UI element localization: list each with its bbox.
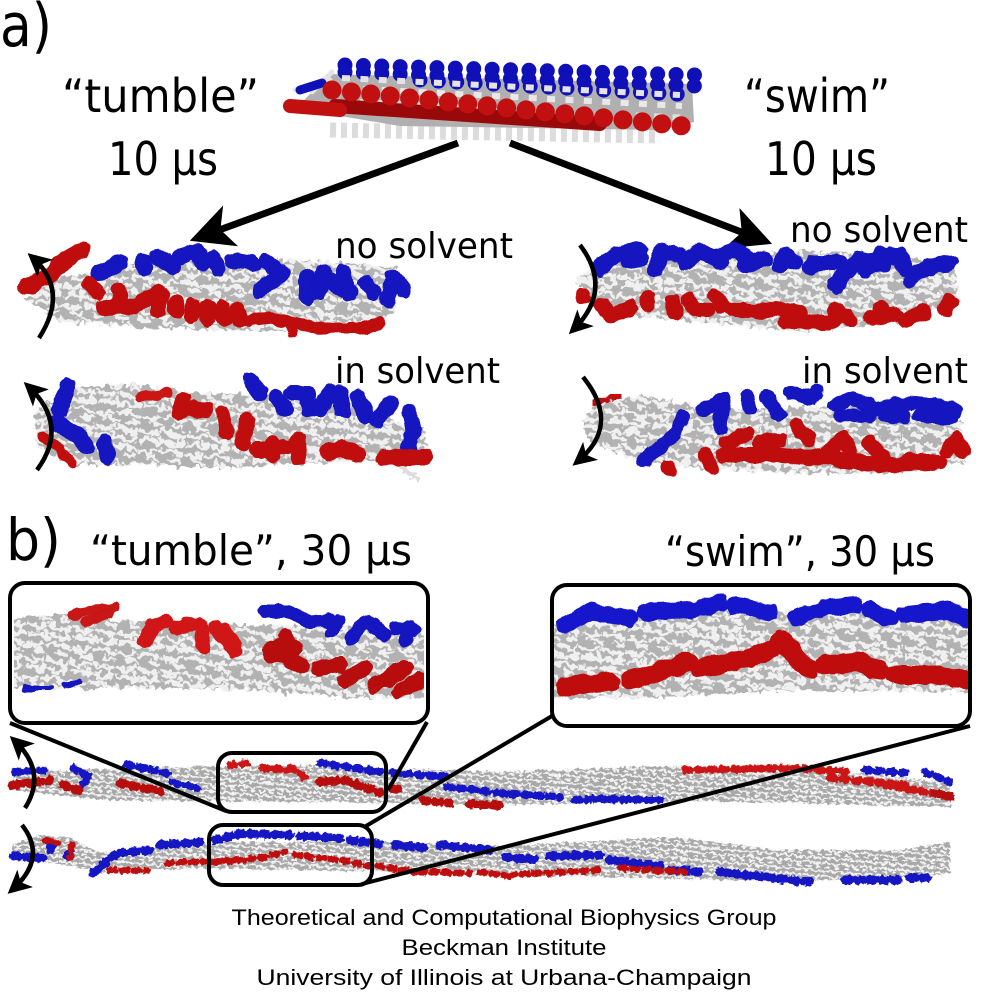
molecule: tumble in solvent	[33, 380, 428, 480]
rotation arrow: tumble no solvent	[32, 257, 53, 338]
credit text	[232, 905, 776, 990]
heading: swim 10 microseconds: 10 μs	[765, 132, 877, 186]
inset: swim close-up	[550, 585, 975, 726]
credit text: Theoretical and Computational Biophysics Group	[232, 905, 776, 930]
zoom box on tumble strip	[218, 753, 386, 812]
credit text: University of Illinois at Urbana-Champaign	[256, 965, 752, 990]
molecule: swim in solvent	[582, 390, 964, 474]
heading: tumble 30 microseconds: “tumble”, 30 μs	[90, 526, 412, 575]
zoom box on swim strip	[209, 825, 372, 885]
credit text: Beckman Institute	[402, 935, 606, 960]
heading: swim 30 microseconds: “swim”, 30 μs	[665, 527, 935, 576]
rotation arrow: swim strip	[12, 825, 33, 890]
heading: tumble 10 microseconds: 10 μs	[108, 132, 218, 186]
heading: tumble 10 microseconds	[62, 69, 259, 186]
zoom lines swim	[362, 716, 970, 884]
rotation arrow: tumble strip	[14, 740, 34, 808]
heading: tumble 10 microseconds: “tumble”	[62, 69, 259, 123]
zoom lines tumble	[10, 722, 427, 811]
heading: swim 10 microseconds: “swim”	[744, 69, 890, 123]
rotation arrow: tumble in solvent	[28, 386, 52, 470]
arrow to swim	[510, 143, 762, 240]
heading: swim 10 microseconds	[744, 69, 890, 186]
long molecule: swim 30 microseconds	[12, 834, 950, 882]
label: in solvent (swim): in solvent	[802, 351, 968, 392]
molecule: swim no solvent	[576, 250, 958, 332]
arrow to tumble	[200, 143, 458, 237]
label: in solvent (tumble): in solvent	[335, 351, 500, 392]
label: no solvent (tumble): no solvent	[335, 226, 513, 267]
inset: tumble close-up	[5, 583, 440, 723]
panel label b): b)	[6, 506, 61, 574]
rotation arrow: swim no solvent	[573, 245, 595, 330]
long molecule: tumble 30 microseconds	[13, 763, 952, 807]
molecule: initial bilayer ribbon	[290, 65, 695, 136]
molecule: tumble no solvent	[24, 250, 403, 333]
rotation arrow: swim in solvent	[577, 377, 601, 462]
label: no solvent (swim): no solvent	[790, 210, 968, 251]
